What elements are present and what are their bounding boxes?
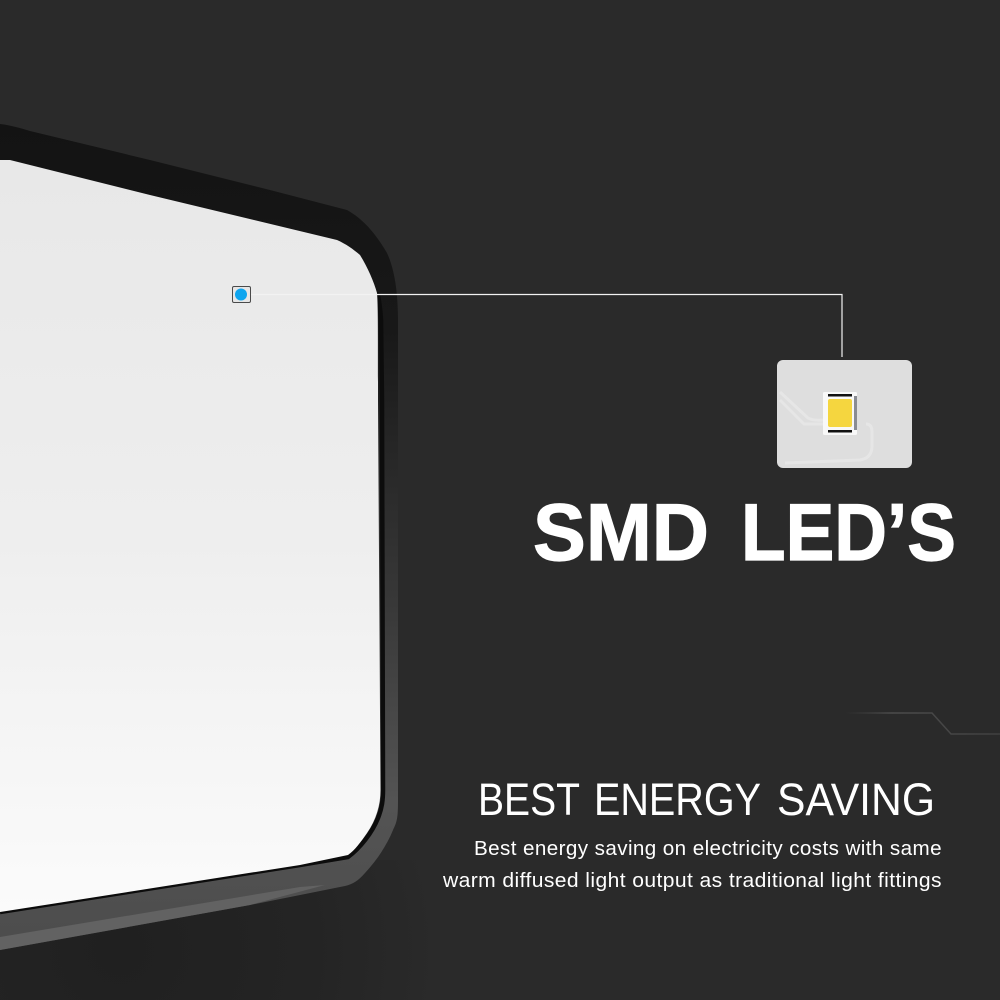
SMD chip [823,392,857,435]
fixture lower lip highlight [0,885,325,950]
description text [442,837,942,892]
fixture frame [0,124,398,950]
subheading: BEST ENERGY SAVING [478,774,935,825]
description text: warm diffused light output as traditional light fittings [442,869,942,892]
heading: SMD LED'S: LED’S [741,488,956,578]
LED close-up card [777,360,912,468]
description text: Best energy saving on electricity costs with same [474,837,942,860]
circuit traces [780,392,872,463]
panel light fixture [0,124,398,950]
heading: SMD LED'S: SMD [533,488,709,578]
subheading: BEST ENERGY SAVING: BEST [478,774,580,825]
subheading: BEST ENERGY SAVING: SAVING [777,774,935,825]
decorative line icon [845,713,1000,734]
heading: SMD LED'S [533,488,956,578]
fixture shadow on background [0,860,440,1000]
marker: blue dot [232,286,250,302]
connector line from marker to LED close-up [251,294,842,357]
fixture white diffuser [0,160,380,912]
fixture inner dark edge [0,293,383,912]
subheading: BEST ENERGY SAVING: ENERGY [594,774,761,825]
